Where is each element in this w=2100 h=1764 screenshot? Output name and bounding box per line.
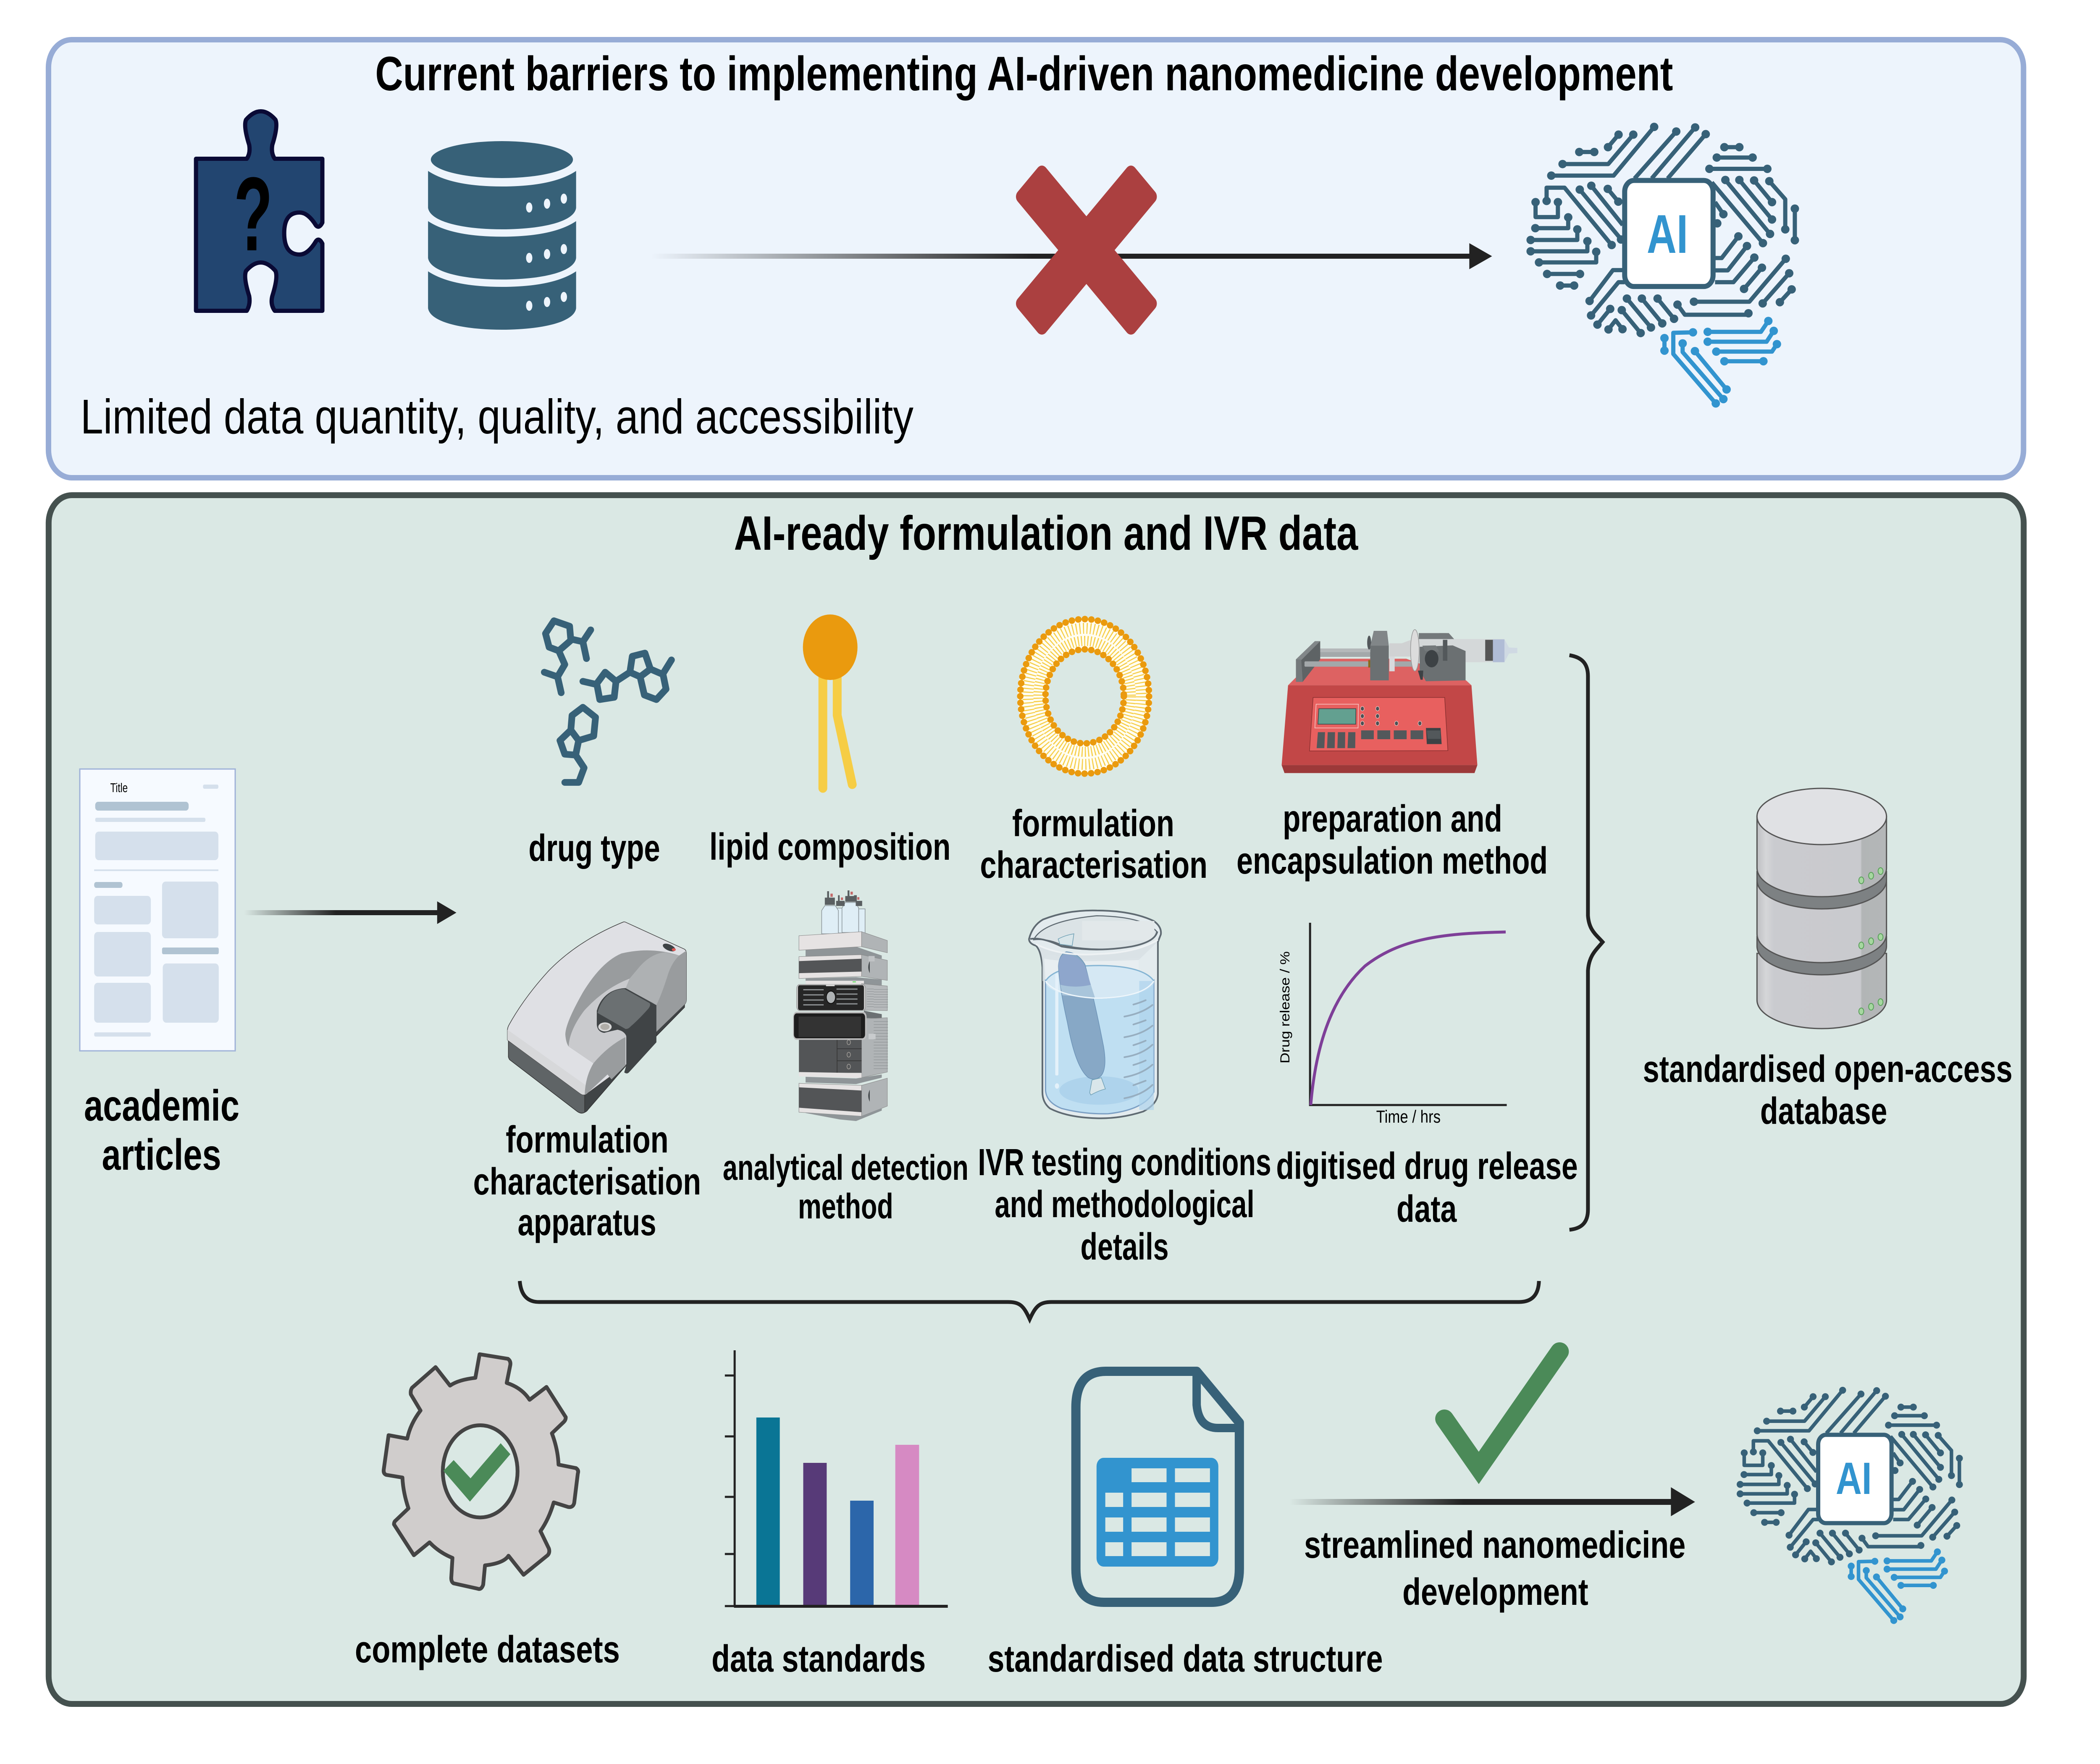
label: analytical detection method: method xyxy=(798,1187,893,1226)
bracket: right brace xyxy=(1570,655,1603,1230)
icon: particle size analyser xyxy=(507,922,686,1113)
panel: AI-ready data xyxy=(49,495,2024,1704)
label: preparation and encapsulation method: preparation and xyxy=(1283,798,1502,840)
label: formulation characterisation apparatus: characterisation xyxy=(473,1160,701,1203)
text: limited data: Limited data quantity, quality, and accessibility xyxy=(81,389,914,444)
icon: AI brain small: AI xyxy=(1836,1453,1872,1504)
label: formulation characterisation apparatus: apparatus xyxy=(517,1201,656,1244)
label: formulation characterisation: characterisation xyxy=(980,844,1208,886)
axis label: time: Time / hrs xyxy=(1376,1107,1441,1127)
label: IVR testing conditions xyxy=(978,1141,1271,1268)
label: digitised drug release data: data xyxy=(1396,1188,1457,1230)
label: standardised open-access database xyxy=(1643,1048,2013,1132)
label: formulation characterisation apparatus: formulation xyxy=(506,1118,669,1161)
title: current barriers: Current barriers to implementing AI-driven nanomedicine development xyxy=(375,47,1673,101)
label: digitised drug release data xyxy=(1276,1145,1578,1230)
title: AI-ready data: AI-ready formulation and IVR data xyxy=(734,507,1358,560)
label: analytical detection method xyxy=(723,1148,969,1226)
icon: puzzle piece with question mark: ? xyxy=(234,155,273,273)
label: complete datasets: complete datasets xyxy=(355,1628,620,1671)
panel: current barriers xyxy=(48,39,2024,478)
label: preparation and encapsulation method: encapsulation method xyxy=(1236,840,1548,882)
icon: syringe pump xyxy=(1282,630,1517,773)
label: streamlined nanomedicine development xyxy=(1304,1524,1685,1613)
label: lipid composition: lipid composition xyxy=(709,826,950,868)
label: IVR testing conditions: IVR testing conditions xyxy=(978,1141,1271,1184)
label: formulation characterisation xyxy=(980,802,1208,886)
label: preparation and encapsulation method xyxy=(1236,798,1548,882)
icon: lipid xyxy=(803,614,858,788)
icon: academic paper xyxy=(80,769,235,1051)
icon: liposome xyxy=(1020,619,1149,774)
axis label: drug release: Drug release / % xyxy=(1278,951,1292,1063)
label: formulation characterisation apparatus xyxy=(473,1118,701,1244)
label: data standards: data standards xyxy=(711,1638,926,1680)
arrow: articles to data xyxy=(244,901,457,924)
chart: data standards bars xyxy=(725,1350,948,1608)
label: analytical detection method: analytical detection xyxy=(723,1148,969,1187)
label: academic articles xyxy=(84,1082,239,1179)
label: IVR testing conditions: and methodological xyxy=(995,1183,1255,1226)
label: standardised data structure: standardised data structure xyxy=(988,1638,1383,1680)
icon: beaker with dialysis bag xyxy=(1029,911,1161,1118)
icon: database xyxy=(428,141,576,330)
icon: spreadsheet file xyxy=(1076,1371,1239,1602)
icon: drug molecules xyxy=(544,621,672,782)
arrow: to streamlined development xyxy=(1289,1487,1695,1516)
icon: AI brain small xyxy=(1740,1390,1959,1620)
label: standardised open-access database: database xyxy=(1760,1090,1887,1132)
label: IVR testing conditions: details xyxy=(1081,1226,1169,1268)
label: academic articles: academic xyxy=(84,1082,239,1130)
icon: gear with check xyxy=(383,1354,578,1589)
label: standardised open-access database: standardised open-access xyxy=(1643,1048,2013,1090)
icon: HPLC stack xyxy=(793,890,887,1121)
icon: standardised database xyxy=(1757,788,1887,1029)
icon: green check xyxy=(1444,1352,1559,1468)
label: academic articles: articles xyxy=(102,1131,221,1179)
arrow: blocked path xyxy=(651,243,1492,269)
icon: academic paper: Title xyxy=(110,781,128,795)
label: digitised drug release data: digitised drug release xyxy=(1276,1145,1578,1187)
icon: AI brain: AI xyxy=(1647,204,1688,265)
label: streamlined nanomedicine development: streamlined nanomedicine xyxy=(1304,1524,1685,1566)
label: streamlined nanomedicine development: development xyxy=(1402,1571,1588,1613)
label: drug type: drug type xyxy=(528,827,660,869)
icon: AI brain xyxy=(1530,127,1795,404)
bracket: bottom brace xyxy=(520,1281,1539,1319)
icon: puzzle piece with question mark xyxy=(196,111,323,311)
label: formulation characterisation: formulation xyxy=(1012,802,1174,845)
icon: red cross xyxy=(1013,163,1159,337)
chart: drug release curve xyxy=(1278,923,1507,1127)
